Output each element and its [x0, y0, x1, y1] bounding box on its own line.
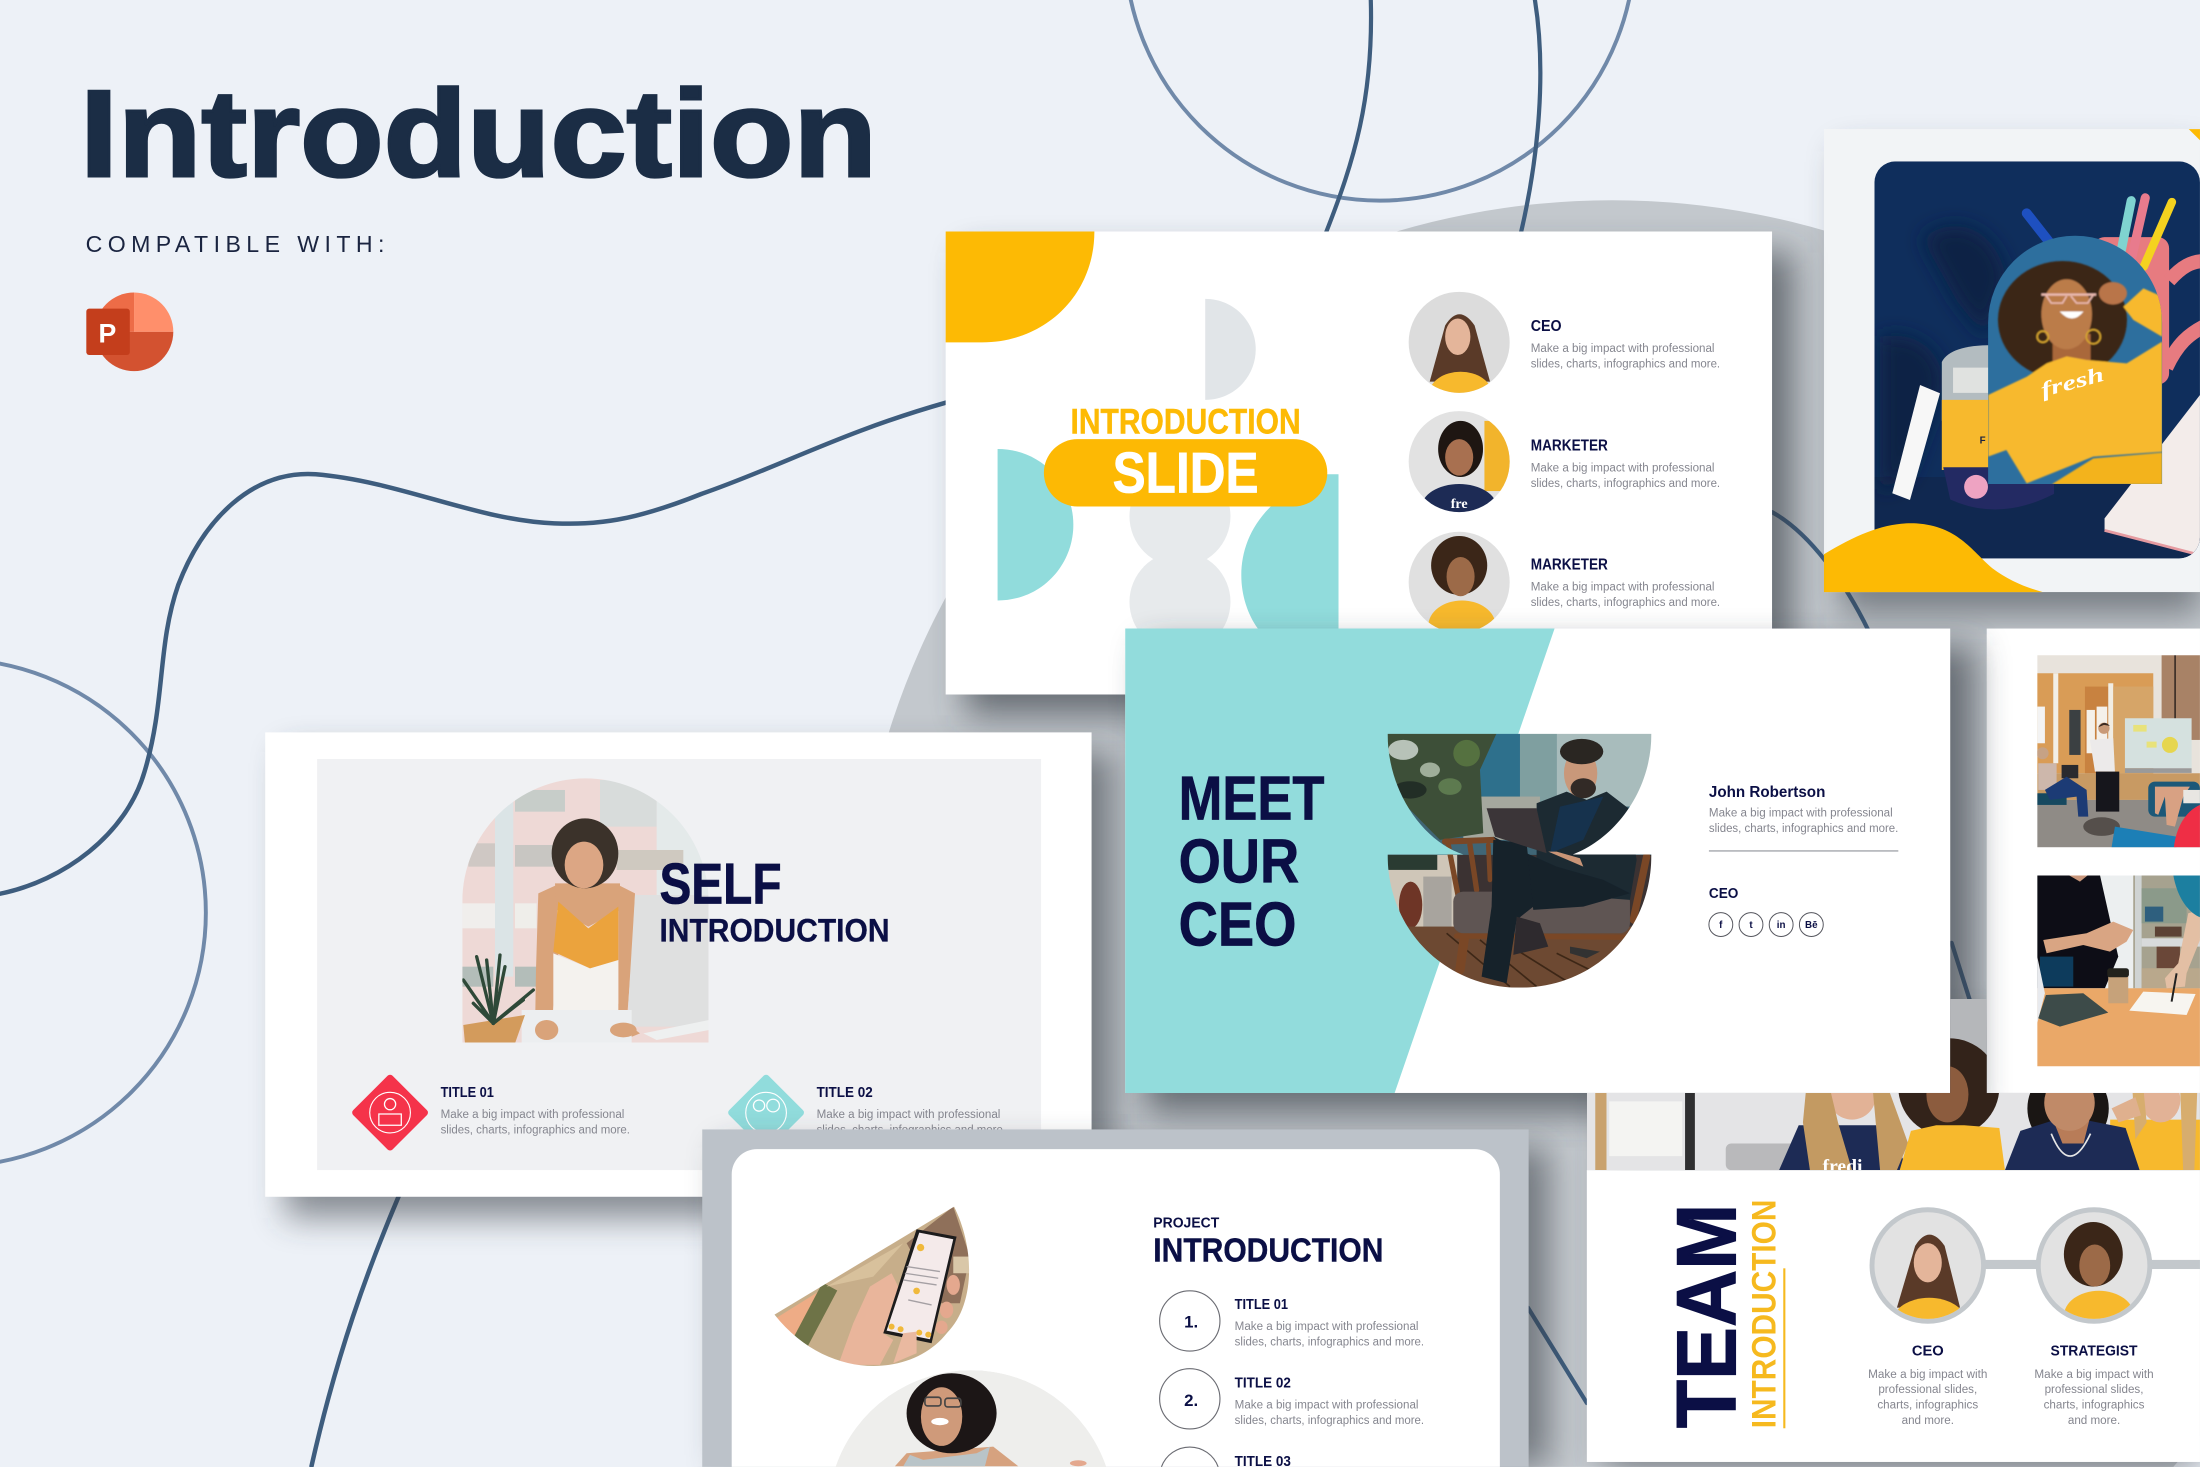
text: CEO and strategist captions: Make a big impact with — [2034, 1368, 2154, 1381]
team list text: slides, charts, infographics and more. — [1531, 477, 1720, 490]
heading: self introduction: SELF — [659, 853, 782, 917]
photo: hand with phone — [773, 1203, 973, 1370]
heading: project introduction: PROJECT — [1153, 1216, 1219, 1232]
text: John Robertson bio: slides, charts, infographics and more. — [1709, 822, 1898, 835]
photo: navy desk scene — [1874, 161, 2200, 558]
text: title 01 — [441, 1085, 630, 1137]
panel: introduction slide — [946, 231, 1793, 716]
portrait: marketer one — [1408, 411, 1510, 512]
panel: meet our CEO slide — [1125, 629, 1975, 1114]
heading: team introduction: INTRODUCTION — [1746, 1200, 1784, 1428]
photo: woman in yellow sweater — [1988, 236, 2162, 484]
text: title 02: TITLE 02 — [817, 1085, 873, 1101]
heading: meet our CEO — [1179, 764, 1325, 960]
yellow corner shape — [946, 231, 1094, 342]
yellow wave — [1824, 523, 2043, 592]
heading: introduction slide: INTRODUCTION — [1071, 403, 1301, 442]
team list text: CEO — [1531, 318, 1562, 335]
text: CEO and strategist captions: professional slides, — [2045, 1383, 2143, 1396]
icon: teal people diamond — [732, 1078, 800, 1147]
icon: red person diamond — [356, 1078, 424, 1147]
heading: team introduction: TEAM — [1660, 1204, 1754, 1428]
photo: team band — [1587, 999, 2200, 1178]
panel: project introduction slide — [702, 1129, 1549, 1467]
text: title 01: Make a big impact with professional — [441, 1108, 624, 1121]
text: John Robertson bio — [1709, 783, 1898, 902]
list item: title 03 — [1161, 1447, 1291, 1467]
portrait: marketer one: fre — [1451, 496, 1468, 512]
teal panel — [1125, 629, 1555, 1093]
team list text: Make a big impact with professional — [1531, 581, 1715, 594]
panel: team introduction slide — [1587, 999, 2200, 1462]
heading: self introduction: INTRODUCTION — [659, 912, 890, 948]
title: Introduction — [80, 65, 877, 203]
heading: meet our CEO: MEET — [1179, 764, 1325, 833]
icon: PowerPoint logo — [86, 293, 173, 371]
portrait: marketer two — [1408, 532, 1510, 628]
team list text: MARKETER — [1531, 557, 1608, 574]
team list text: slides, charts, infographics and more. — [1531, 358, 1720, 371]
icons: social links — [1709, 913, 1823, 937]
text: CEO and strategist captions: and more. — [2068, 1414, 2120, 1427]
text: title 01: TITLE 01 — [441, 1085, 494, 1101]
photo: woman at desk — [462, 777, 709, 1043]
text: John Robertson bio: John Robertson — [1709, 783, 1825, 801]
list item: title 02: slides, charts, infographics and more. — [1235, 1414, 1424, 1427]
list item: title 01: TITLE 01 — [1235, 1297, 1288, 1313]
pens — [2027, 213, 2050, 243]
team list text: slides, charts, infographics and more. — [1531, 596, 1720, 609]
text: CEO and strategist captions: professional slides, — [1878, 1383, 1977, 1396]
panel: product photo slide — [1824, 129, 2200, 615]
text: title 02: Make a big impact with professional — [817, 1108, 1000, 1121]
text: CEO and strategist captions: STRATEGIST — [2051, 1343, 2138, 1359]
heading: project introduction — [1153, 1216, 1383, 1269]
decorative half circles — [998, 299, 1339, 652]
text: CEO and strategist captions — [1868, 1343, 2154, 1427]
mug — [2093, 237, 2169, 384]
text: John Robertson bio: Make a big impact with professional — [1709, 807, 1893, 820]
heading: introduction slide: SLIDE — [1113, 441, 1259, 505]
list item: title 01: 1. — [1184, 1312, 1198, 1331]
text: title 02 — [817, 1085, 1006, 1137]
lid — [1892, 385, 1940, 500]
heading: introduction slide — [1044, 403, 1327, 506]
panel: self introduction slide — [265, 732, 1113, 1218]
text: John Robertson bio: CEO — [1709, 886, 1738, 902]
text: title 01: slides, charts, infographics and more. — [441, 1124, 630, 1137]
jar — [1942, 345, 1992, 421]
text: CEO and strategist captions: and more. — [1902, 1414, 1954, 1427]
notebook — [2105, 395, 2200, 555]
photo: team band: fredi — [1823, 1156, 1863, 1178]
portrait: team CEO — [1870, 1207, 1986, 1324]
photo: woman in yellow sweater: fresh — [2038, 362, 2106, 402]
portrait: CEO — [1408, 292, 1510, 393]
list item: title 01: Make a big impact with professional — [1235, 1320, 1418, 1333]
team slide shadow — [1606, 1019, 2200, 1466]
heading: self introduction — [659, 853, 890, 948]
text: CEO and strategist captions: Make a big impact with — [1868, 1368, 1987, 1381]
text: CEO and strategist captions: charts, infographics — [2044, 1399, 2145, 1412]
icons: social links: f — [1719, 920, 1723, 931]
photo: CEO with laptop — [1387, 733, 1652, 988]
icon: PowerPoint logo: P — [98, 318, 116, 348]
text: title 02: slides, charts, infographics and more. — [817, 1124, 1006, 1137]
team list text: Make a big impact with professional — [1531, 461, 1715, 474]
photo: office meeting — [2037, 655, 2200, 847]
team list text: Make a big impact with professional — [1531, 342, 1715, 355]
heading: meet our CEO: CEO — [1179, 891, 1296, 960]
photo: laughing woman — [836, 1370, 1106, 1467]
subtitle: compatible with: COMPATIBLE WITH: — [86, 231, 384, 257]
photo: navy desk scene: F — [1980, 435, 1986, 446]
icons: social links: t — [1749, 920, 1753, 931]
heading: meet our CEO: OUR — [1179, 828, 1299, 897]
portrait: team strategist — [2036, 1207, 2152, 1324]
panel: office photos slide — [1987, 629, 2200, 1093]
grey backdrop circle — [854, 200, 2200, 1467]
heading: project introduction: INTRODUCTION — [1153, 1232, 1383, 1269]
icons: social links: Bē — [1805, 920, 1818, 931]
photo: desk hands — [2037, 875, 2200, 1067]
list item: title 01 — [1160, 1291, 1424, 1351]
list item: title 02 — [1160, 1369, 1424, 1429]
list item: title 01: slides, charts, infographics and more. — [1235, 1335, 1424, 1348]
list item: title 02: 2. — [1184, 1391, 1198, 1410]
list item: title 02: Make a big impact with professional — [1235, 1399, 1418, 1412]
team list text — [1531, 318, 1720, 609]
icons: social links: in — [1777, 920, 1786, 931]
connector bars — [1984, 1260, 2200, 1269]
text: CEO and strategist captions: CEO — [1912, 1343, 1944, 1359]
text: CEO and strategist captions: charts, infographics — [1877, 1399, 1978, 1412]
team list text: MARKETER — [1531, 437, 1608, 454]
list item: title 02: TITLE 02 — [1235, 1376, 1291, 1392]
